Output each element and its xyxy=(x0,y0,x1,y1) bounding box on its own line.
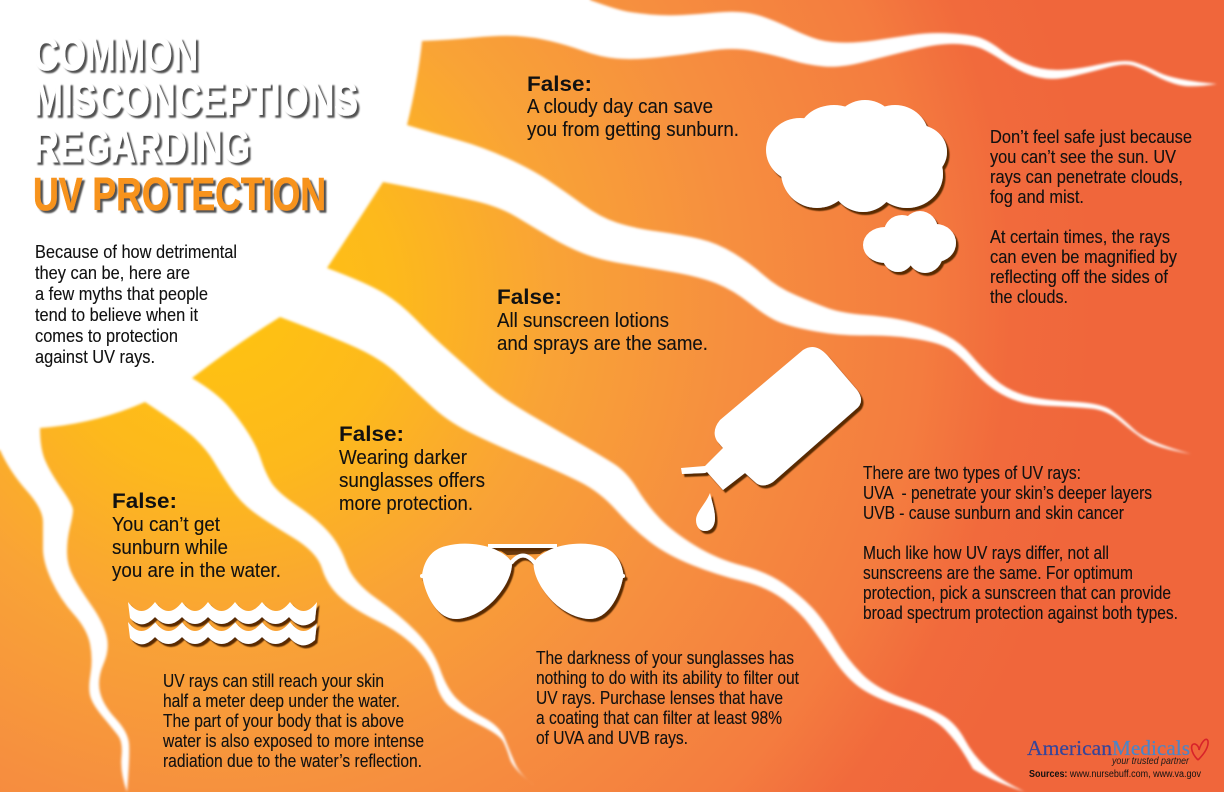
heading: sunglasses: more protection. xyxy=(339,492,473,515)
intro text: a few myths that people xyxy=(35,284,208,304)
intro text: comes to protection xyxy=(35,326,178,346)
text: cloud explanation: the clouds. xyxy=(990,287,1068,307)
text: sunglasses explanation xyxy=(536,648,799,748)
text: cloud explanation: can even be magnified by xyxy=(990,247,1177,267)
panel: water myth xyxy=(112,490,424,771)
text: sunscreen explanation xyxy=(863,463,1178,623)
text: water explanation: radiation due to the water’s reflection. xyxy=(163,751,422,771)
text: water explanation: water is also exposed to more intense xyxy=(162,731,424,751)
text: sunscreen explanation: protection, pick a sunscreen that can provide xyxy=(863,583,1171,603)
intro text: Because of how detrimental xyxy=(35,242,237,262)
text: cloud explanation: fog and mist. xyxy=(990,187,1084,207)
text: water explanation: UV rays can still reach your skin xyxy=(163,671,384,691)
text: sunglasses explanation: of UVA and UVB rays. xyxy=(536,728,688,748)
intro text xyxy=(35,242,237,367)
heading: sunglasses: sunglasses offers xyxy=(339,469,485,492)
heading: cloudy day: A cloudy day can save xyxy=(527,95,713,118)
text: sunglasses explanation: UV rays. Purchase lenses that have xyxy=(536,688,783,708)
heading: cloudy day: False: xyxy=(527,73,592,96)
icon: water waves xyxy=(128,602,317,645)
logo: American Medicals: American xyxy=(1027,736,1113,760)
title: white heading lines xyxy=(33,28,358,172)
panel: cloudy day myth xyxy=(527,73,1192,307)
icon: lotion drop xyxy=(696,493,715,531)
icon: large cloud xyxy=(766,100,947,212)
icon: aviator sunglasses xyxy=(420,544,625,619)
heading: water: False: xyxy=(112,490,177,513)
text: water explanation: half a meter deep under the water. xyxy=(163,691,400,711)
icon: small cloud xyxy=(863,211,956,273)
intro text: tend to believe when it xyxy=(35,305,198,325)
text: water explanation xyxy=(162,671,424,771)
logo: American Medicals: Medicals xyxy=(1112,736,1190,760)
text: sunscreen explanation: sunscreens are the same. For optimum xyxy=(863,563,1133,583)
text: cloud explanation xyxy=(990,127,1192,307)
heading: sunglasses: False: xyxy=(339,423,404,446)
text: cloud explanation: you can’t see the sun. UV xyxy=(990,147,1176,167)
heading: water: sunburn while xyxy=(112,536,228,559)
text: cloud explanation: Don’t feel safe just because xyxy=(990,127,1192,147)
heading: sunscreen xyxy=(497,286,708,355)
heading: water: you are in the water. xyxy=(112,559,281,582)
title: white heading lines: MISCONCEPTIONS xyxy=(33,73,358,125)
heading: sunglasses: Wearing darker xyxy=(339,446,467,469)
text: sunscreen explanation: UVB - cause sunburn and skin cancer xyxy=(863,503,1124,523)
icon: sunscreen bottle xyxy=(681,347,861,490)
title xyxy=(33,28,358,220)
panel: sunglasses myth xyxy=(339,423,799,748)
text: water explanation: The part of your body that is above xyxy=(163,711,404,731)
title: white heading lines: COMMON xyxy=(33,28,198,80)
text: sunglasses explanation: nothing to do with its ability to filter out xyxy=(536,668,799,688)
heading: water: You can’t get xyxy=(112,513,220,536)
heading: cloudy day xyxy=(527,73,739,141)
heading: cloudy day: you from getting sunburn. xyxy=(527,118,739,141)
text: sunglasses explanation: The darkness of your sunglasses has xyxy=(536,648,794,668)
text: cloud explanation: rays can penetrate clouds, xyxy=(990,167,1183,187)
heading: sunscreen: and sprays are the same. xyxy=(497,332,708,355)
text: cloud explanation: reflecting off the sides of xyxy=(990,267,1169,287)
heading: sunglasses xyxy=(339,423,485,515)
intro text: against UV rays. xyxy=(35,347,155,367)
text: sunscreen explanation: broad spectrum protection against both types. xyxy=(863,603,1178,623)
logo: American Medicals xyxy=(1027,736,1208,767)
text: cloud explanation: At certain times, the rays xyxy=(990,227,1170,247)
text: sunscreen explanation: There are two types of UV rays: xyxy=(863,463,1081,483)
sources: Sources: www.nursebuff.com, www.va.gov xyxy=(1029,769,1201,780)
text: sunscreen explanation: Much like how UV rays differ, not all xyxy=(863,543,1109,563)
icon: heart xyxy=(1192,739,1208,760)
panel: sunscreen myth xyxy=(497,286,1178,623)
title: white heading lines: REGARDING xyxy=(33,120,250,172)
intro text: they can be, here are xyxy=(35,263,190,283)
heading: sunscreen: False: xyxy=(497,286,562,309)
text: sunscreen explanation: UVA - penetrate your skin’s deeper layers xyxy=(863,483,1152,503)
logo: American Medicals: your trusted partner xyxy=(1111,755,1189,767)
heading: water xyxy=(112,490,281,582)
text: sunglasses explanation: a coating that can filter at least 98% xyxy=(536,708,782,728)
title: UV protection: UV PROTECTION xyxy=(33,168,326,220)
heading: sunscreen: All sunscreen lotions xyxy=(497,309,669,332)
